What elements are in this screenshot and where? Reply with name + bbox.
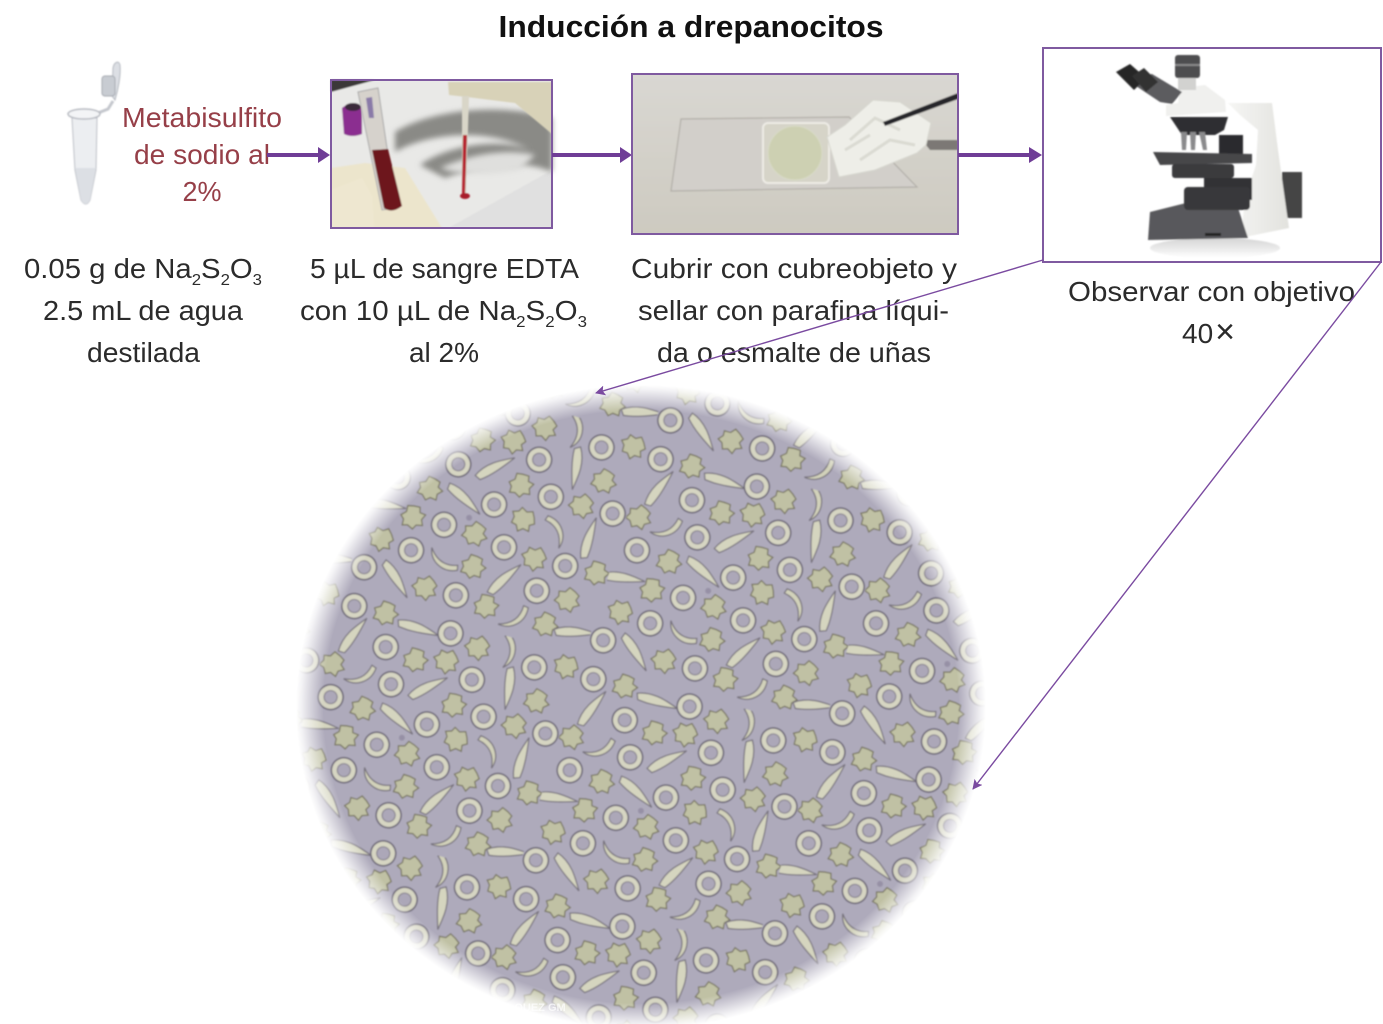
arrow: slide to microscope <box>958 147 1042 163</box>
caption: step 1: O <box>230 253 253 284</box>
reagent label: de sodio al <box>134 139 270 170</box>
panel: microscope <box>1043 48 1381 262</box>
panel: blood sample photo <box>331 80 552 228</box>
reagent label: Metabisulfito <box>122 102 282 133</box>
icon: microscope <box>1116 55 1302 258</box>
caption: step 3: da o esmalte de uñas <box>657 337 931 368</box>
caption: step 2: 3 <box>578 314 587 331</box>
caption: step 2: 2 <box>545 314 555 331</box>
caption: step 1: destilada <box>87 337 200 368</box>
zoom line: right <box>973 262 1381 789</box>
caption: step 1: 2 <box>192 272 201 289</box>
icon: microcentrifuge tube <box>68 62 120 204</box>
caption: step 2: al 2% <box>409 337 479 368</box>
reagent label: 2% <box>182 176 222 207</box>
caption: step 4 <box>1068 276 1355 351</box>
reagent label <box>122 102 282 207</box>
watermark: QUEZ GM <box>514 1002 566 1014</box>
caption: step 3: sellar con parafina líqui- <box>638 295 949 326</box>
micrograph: sickled red blood cells <box>284 376 998 1024</box>
caption: step 1: 3 <box>253 272 262 289</box>
caption: step 2: con 10 µL de Na <box>300 295 505 326</box>
arrow: blood to slide <box>552 147 632 163</box>
caption: step 2: S <box>526 295 545 326</box>
zoom line: left <box>596 260 1043 393</box>
caption: step 2 <box>300 253 587 368</box>
caption: step 1: 2 <box>221 272 230 289</box>
arrow: reagent to blood <box>267 147 330 163</box>
title: Inducción a drepanocitos <box>498 9 884 44</box>
caption: step 1: 2.5 mL de agua <box>43 295 243 326</box>
caption: step 4: Observar con objetivo <box>1068 276 1355 307</box>
caption: step 1 <box>24 253 262 368</box>
caption: step 1: 0.05 g de Na <box>24 253 184 284</box>
caption: step 3 <box>631 253 957 368</box>
caption: step 2: 2 <box>516 314 526 331</box>
caption: step 3: Cubrir con cubreobjeto y <box>631 253 957 284</box>
caption: step 1: S <box>201 253 221 284</box>
caption: step 2: O <box>555 295 578 326</box>
caption: step 4: 40× <box>1182 313 1235 351</box>
caption: step 2: 5 µL de sangre EDTA <box>310 253 579 284</box>
panel: cover slip photo <box>632 74 958 234</box>
